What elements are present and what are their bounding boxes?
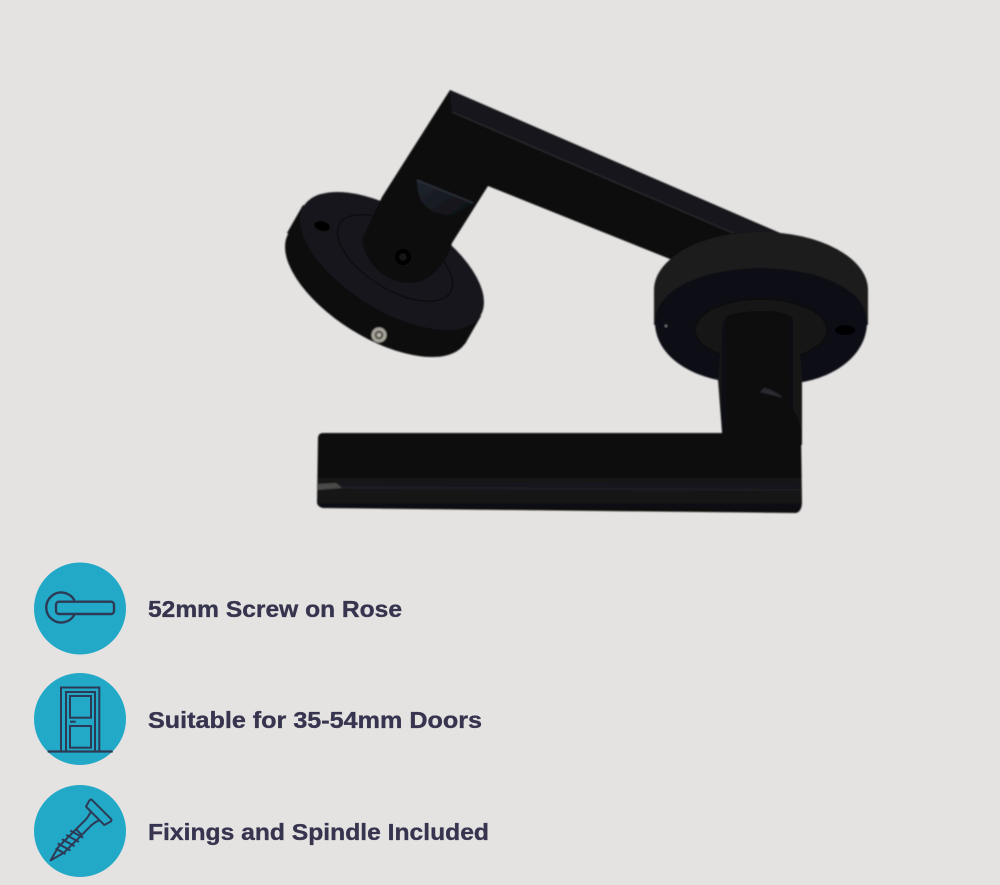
right handle: neck and horizontal lever (317, 311, 802, 513)
product photo: black lever handles (263, 90, 868, 513)
feature 2: door thickness (34, 673, 482, 765)
label: Suitable for 35-54mm Doors (148, 707, 482, 733)
left handle: round rose (263, 164, 506, 385)
rose fixing hole (313, 219, 331, 233)
left handle: neck and angled lever (362, 90, 780, 283)
icon: door (34, 673, 126, 765)
hex socket screw (395, 249, 411, 265)
feature 1: 52mm screw on rose (34, 562, 402, 654)
right handle: round rose (654, 232, 868, 382)
lever shoulder highlight (417, 180, 473, 215)
small speck on rose (665, 325, 667, 327)
icon: door handle (34, 562, 126, 654)
label: Fixings and Spindle Included (148, 819, 489, 845)
rose fixing hole (835, 325, 855, 335)
icon: screw (34, 785, 126, 877)
silver grub screw (372, 328, 386, 342)
label: 52mm Screw on Rose (148, 596, 402, 622)
lever bevel highlight (340, 486, 801, 491)
feature 3: fixings (34, 785, 489, 877)
